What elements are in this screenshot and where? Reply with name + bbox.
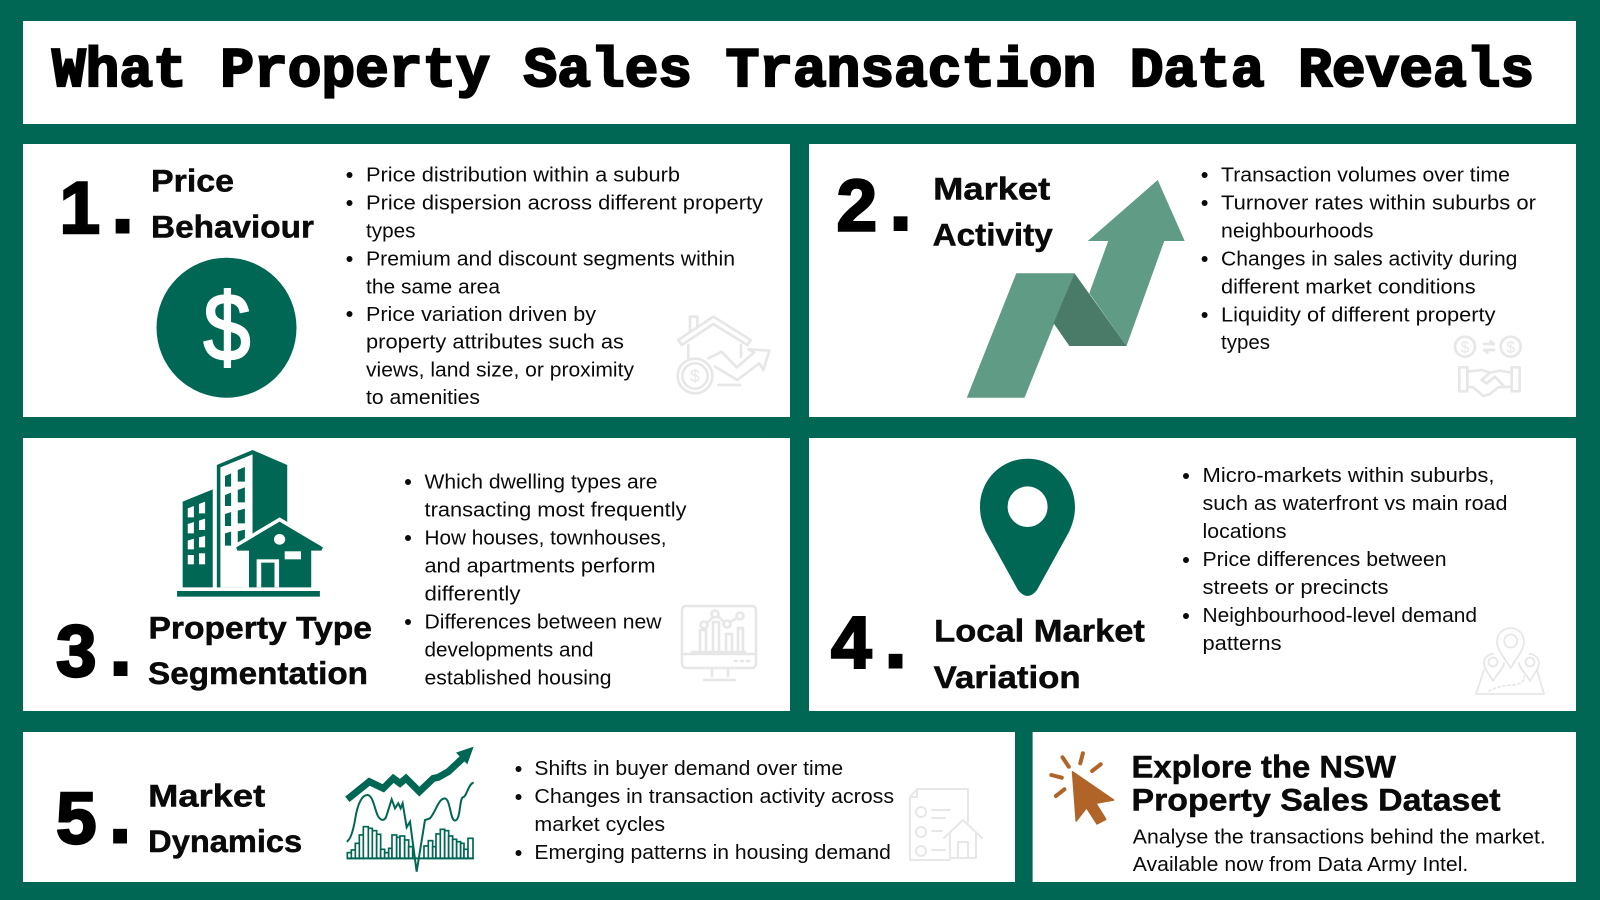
bullet list: price behaviour: Premium and discount segments within (366, 249, 735, 271)
bullet list: property type: Which dwelling types are (424, 471, 658, 493)
bullet list: local market: such as waterfront vs main road (1202, 493, 1508, 515)
number 2: . (887, 142, 914, 252)
icon: rising arrow (967, 180, 1185, 398)
heading: price behaviour: Price (151, 163, 234, 199)
icon: dollar coin: $ (204, 274, 250, 381)
panel: 5 market dynamics (23, 732, 1015, 882)
bullet list: market activity: Turnover rates within suburbs or (1221, 193, 1536, 215)
panel: 1 price behaviour (23, 144, 790, 417)
icon: cursor click (1051, 753, 1114, 824)
bullet list: market activity: types (1221, 332, 1270, 354)
icon: faded handshake and dollars: $ (1461, 339, 1470, 356)
heading: explore dataset: Explore the NSW (1132, 748, 1396, 784)
number 4: 4 (831, 603, 872, 684)
heading: property type segmentation (148, 609, 372, 691)
panel: 3 property type segmentation (23, 438, 790, 711)
title banner: What Property Sales Transaction Data Reveals (52, 39, 1534, 103)
number 5: . (106, 754, 134, 864)
heading: market dynamics (148, 778, 302, 859)
bullet list: market dynamics: market cycles (534, 814, 665, 836)
bullet list: market activity (1202, 165, 1536, 354)
bullet list: market activity: different market conditions (1221, 276, 1476, 298)
bullet list: property type: transacting most frequently (424, 499, 686, 521)
title banner (23, 21, 1576, 124)
number 5: 5 (56, 778, 97, 860)
bullet list: local market: patterns (1202, 633, 1282, 655)
text block: call to action: Available now from Data Army Intel. (1133, 854, 1468, 876)
icon: faded checklist house (910, 789, 982, 860)
bullet list: property type: developments and (424, 639, 594, 661)
heading: local market variation (934, 613, 1145, 695)
heading: local market variation: Variation (934, 659, 1081, 695)
icon: faded map pins (1476, 628, 1544, 694)
number 3: . (107, 587, 134, 697)
bullet list: price behaviour: property attributes such as (366, 332, 624, 354)
bullet list: price behaviour: views, land size, or proximity (366, 360, 634, 382)
bullet list: local market: Price differences between (1202, 549, 1446, 571)
heading: market activity: Activity (933, 216, 1053, 252)
bullet list: market activity: neighbourhoods (1221, 221, 1374, 243)
bullet list: price behaviour: the same area (366, 276, 501, 298)
heading: local market variation: Local Market (934, 613, 1145, 649)
icon: faded handshake and dollars (1455, 337, 1521, 396)
panel: call to action (1033, 732, 1576, 882)
icon: faded house and coin (678, 317, 769, 393)
heading: price behaviour (151, 163, 314, 245)
bullet list: price behaviour: types (366, 221, 416, 243)
heading: market activity (933, 170, 1053, 252)
bullet list: local market: Micro-markets within suburbs, (1202, 465, 1494, 487)
bullet list: market dynamics: Emerging patterns in housing demand (534, 842, 891, 864)
heading: price behaviour: Behaviour (151, 209, 314, 245)
bullet list: price behaviour: Price distribution within a suburb (366, 165, 680, 187)
bullet list: market dynamics: Shifts in buyer demand over time (534, 758, 843, 780)
heading: property type segmentation: Segmentation (148, 655, 368, 691)
icon: map pin (980, 459, 1075, 596)
bullet list: market dynamics: Changes in transaction activity across (534, 786, 894, 808)
bullet list: price behaviour: Price variation driven by (366, 304, 596, 326)
heading: explore dataset: Property Sales Dataset (1132, 782, 1501, 818)
heading: explore dataset (1132, 748, 1501, 818)
bullet list: local market: locations (1202, 521, 1286, 543)
bullet list: property type: Differences between new (424, 611, 662, 633)
number 4: . (882, 580, 909, 690)
heading: market dynamics: Dynamics (148, 823, 302, 859)
number 1: 1 (60, 168, 100, 249)
icon: faded handshake and dollars: $ (1506, 339, 1515, 356)
panel: 2 market activity (809, 142, 1576, 417)
bullet list: property type: differently (424, 583, 520, 605)
bullet list: property type: and apartments perform (424, 555, 656, 577)
bullet list: market activity: Transaction volumes over time (1221, 165, 1510, 187)
bullet list: market activity: Changes in sales activity during (1221, 249, 1517, 271)
bullet list: price behaviour (346, 165, 763, 409)
text block: call to action: Analyse the transactions behind the market. (1133, 826, 1546, 848)
bullet list: price behaviour: Price dispersion across different property (366, 193, 763, 215)
chart icon: market trend (347, 747, 474, 872)
heading: market activity: Market (933, 170, 1051, 206)
bullet list: market activity: Liquidity of different property (1221, 304, 1496, 326)
number 2: 2 (836, 166, 877, 246)
icon: faded monitor chart (682, 606, 756, 680)
bullet list: market dynamics (516, 758, 894, 864)
text block: call to action (1133, 826, 1546, 876)
bullet list: price behaviour: to amenities (366, 387, 480, 409)
bullet list: property type (405, 471, 686, 689)
bullet list: property type: How houses, townhouses, (424, 527, 666, 549)
bullet list: local market (1183, 465, 1508, 655)
number 1: . (109, 144, 136, 254)
icon: faded house and coin: $ (690, 366, 700, 386)
bullet list: property type: established housing (424, 667, 612, 689)
panel: 4 local market variation (809, 438, 1576, 711)
bullet list: local market: Neighbourhood-level demand (1202, 605, 1477, 627)
icon: buildings and house (177, 450, 331, 597)
heading: market dynamics: Market (148, 778, 266, 814)
bullet list: local market: streets or precincts (1202, 577, 1388, 599)
heading: property type segmentation: Property Type (148, 609, 372, 645)
number 3: 3 (56, 611, 97, 692)
icon: dollar coin (156, 258, 296, 398)
